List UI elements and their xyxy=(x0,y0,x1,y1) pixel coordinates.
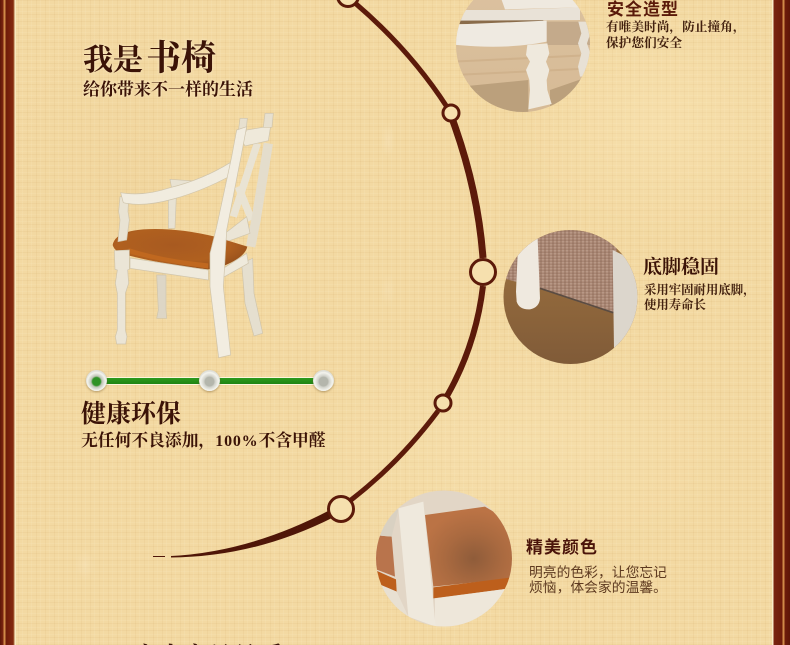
top rail and finials xyxy=(237,126,271,146)
slider node middle xyxy=(199,370,220,391)
text: safe shape description: 有唯美时尚，防止撞角， xyxy=(606,20,746,34)
progress slider xyxy=(85,370,335,393)
near armrest xyxy=(121,163,232,204)
far rear leg xyxy=(157,275,167,318)
photo: stable foot xyxy=(500,228,642,368)
subtitle: 给你带来不一样的生活 xyxy=(83,80,253,99)
left decorative border xyxy=(0,0,16,645)
rear right leg xyxy=(242,258,263,336)
photo: chair leg safe shape xyxy=(450,0,595,115)
slider track xyxy=(104,378,316,384)
photo: fine colour xyxy=(376,490,512,626)
heading: stable foot: 底脚稳固 xyxy=(643,257,719,278)
slider node active xyxy=(86,370,107,391)
heading: fine colour: 精美颜色 xyxy=(526,538,598,557)
text: fine colour description: 烦恼，体会家的温馨。 xyxy=(529,580,667,595)
slider node end xyxy=(313,370,334,391)
text: safe shape description: 保护您们安全 xyxy=(606,36,682,50)
curved timeline xyxy=(153,0,496,558)
heading: safe shape: 安全造型 xyxy=(607,0,679,19)
text: stable foot description xyxy=(644,283,756,312)
far armrest xyxy=(168,179,203,228)
text: no additives: 无任何不良添加，100%不含甲醛 xyxy=(81,431,326,450)
near back post xyxy=(210,127,247,358)
text: fine colour description: 明亮的色彩，让您忘记 xyxy=(529,565,667,580)
text: fine colour description xyxy=(529,565,667,595)
title: 我是书椅 xyxy=(83,39,216,78)
right decorative border xyxy=(772,0,790,645)
front left leg xyxy=(114,250,129,344)
seat apron xyxy=(130,253,248,280)
text: stable foot description: 采用牢固耐用底脚， xyxy=(644,283,756,297)
heading: healthy and eco-friendly: 健康环保 xyxy=(81,401,181,428)
chair illustration xyxy=(112,0,638,626)
seat xyxy=(113,229,247,269)
text: stable foot description: 使用寿命长 xyxy=(644,298,706,312)
back lattice xyxy=(233,143,257,220)
text: safe shape description xyxy=(606,20,746,50)
